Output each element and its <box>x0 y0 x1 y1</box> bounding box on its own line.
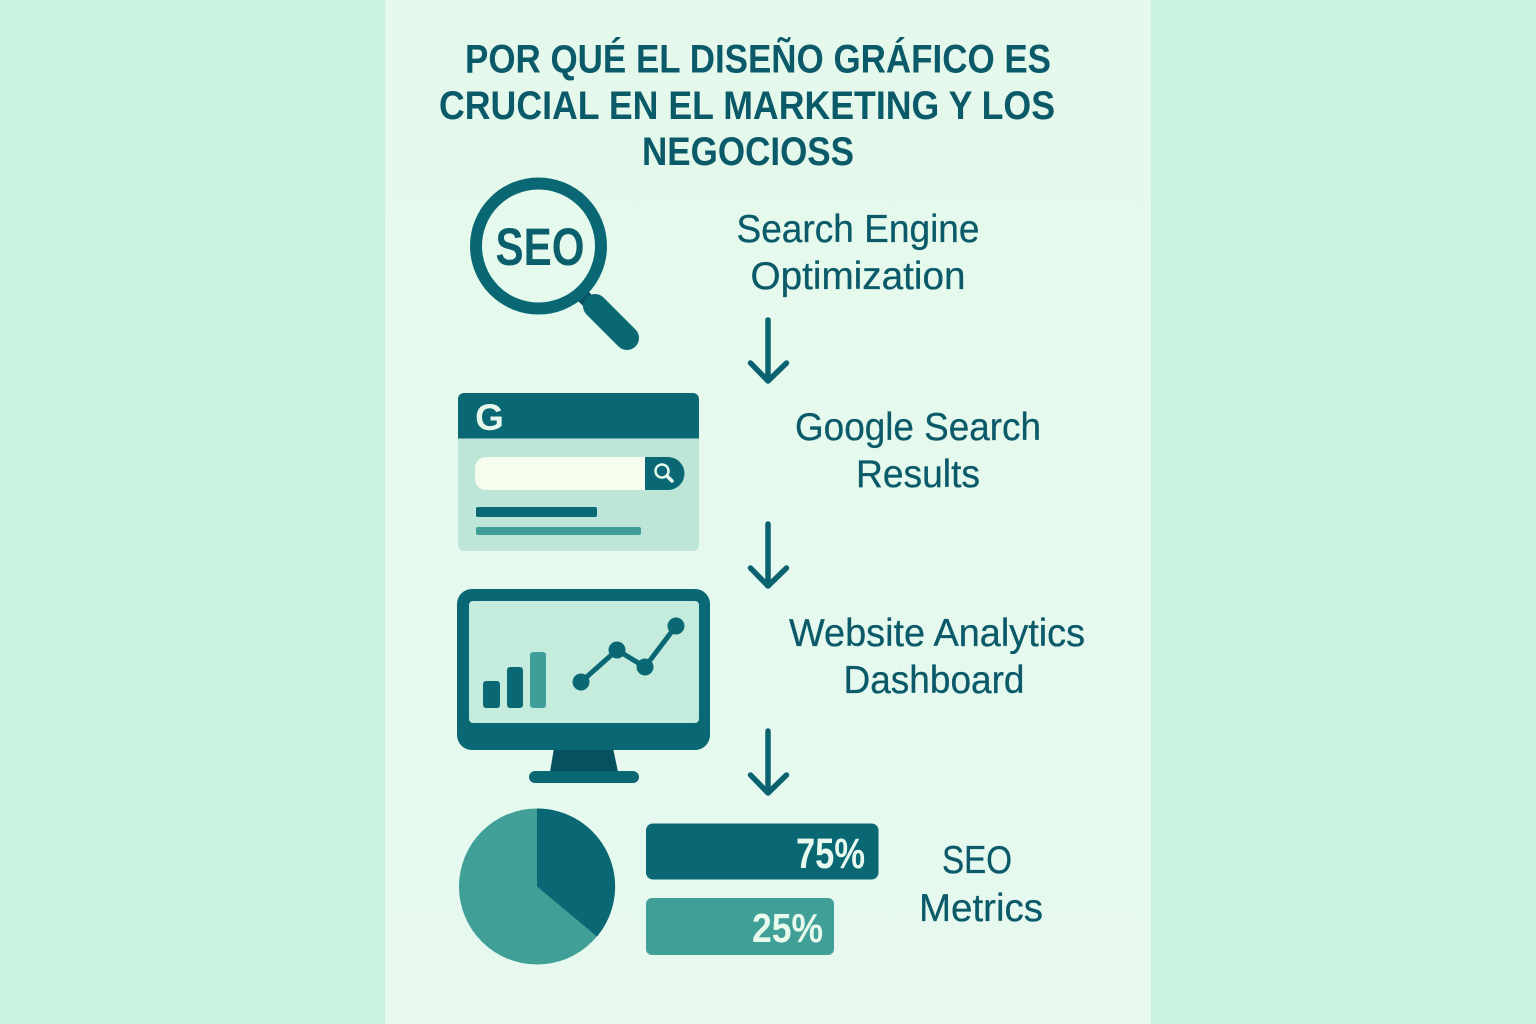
text: Website Analytics Dashboard: Website Analytics <box>789 612 1085 655</box>
bar: 75% <box>646 824 878 880</box>
text: Search Engine Optimization: Search Engine <box>736 208 980 251</box>
text: SEO Metrics <box>919 839 1043 930</box>
arrow 2 <box>750 524 786 586</box>
bar: 25% <box>646 898 834 955</box>
title <box>439 36 1055 174</box>
icon: analytics monitor <box>457 589 710 783</box>
text: Search Engine Optimization: Optimization <box>750 255 966 298</box>
pie chart <box>459 808 615 964</box>
icon: SEO magnifying glass <box>476 184 627 338</box>
text: Google Search Results <box>795 406 1041 496</box>
text: SEO Metrics: Metrics <box>919 887 1043 930</box>
icon: Google search window <box>458 393 699 551</box>
text: Website Analytics Dashboard <box>789 612 1085 702</box>
title: CRUCIAL EN EL MARKETING Y LOS <box>439 84 1055 128</box>
title: POR QUÉ EL DISEÑO GRÁFICO ES <box>465 36 1051 82</box>
title: NEGOCIOSS <box>642 130 854 174</box>
text: SEO Metrics: SEO <box>942 839 1012 882</box>
bar: 25%: 25% <box>752 905 823 951</box>
text: Website Analytics Dashboard: Dashboard <box>844 659 1024 702</box>
icon: SEO magnifying glass: SEO <box>496 218 584 277</box>
arrow 1 <box>750 320 786 381</box>
text: Google Search Results: Results <box>856 453 980 496</box>
icon: Google search window: G <box>475 397 504 438</box>
bar: 75%: 75% <box>796 830 865 878</box>
text: Google Search Results: Google Search <box>795 406 1041 449</box>
arrow 3 <box>750 731 786 793</box>
text: Search Engine Optimization <box>736 208 980 298</box>
panel: central column <box>385 0 1151 1024</box>
